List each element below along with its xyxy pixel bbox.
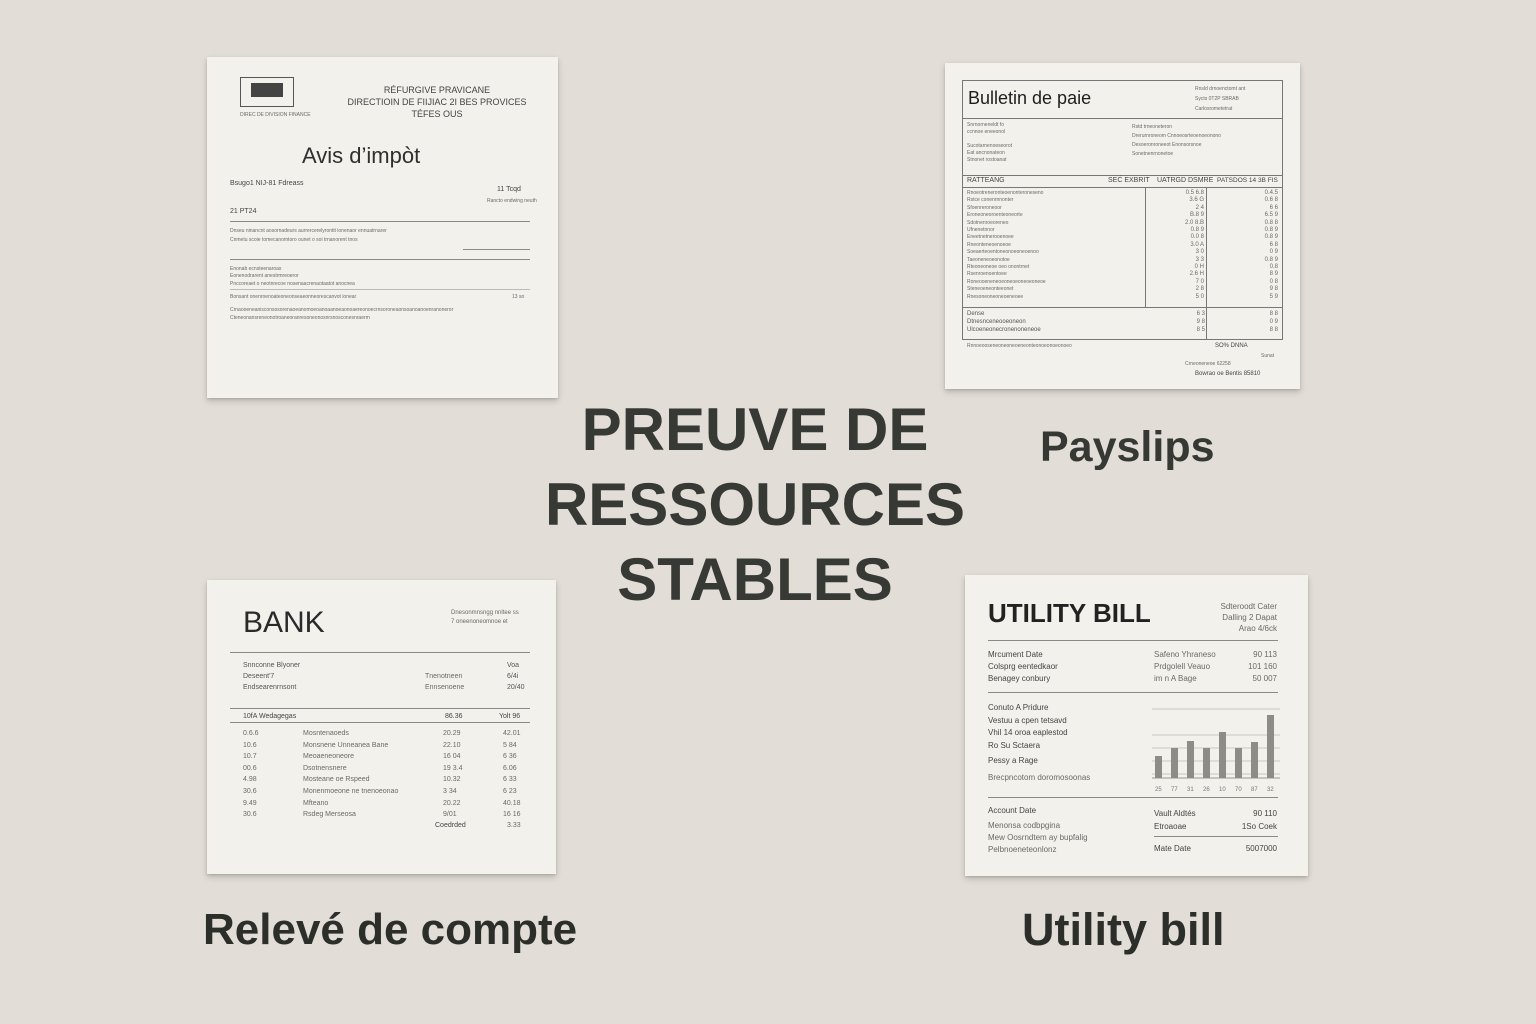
document: bulletin de paie: Soeaerteoentoneonoeoneoenoo (967, 249, 1039, 255)
document: bank: 22.10 (443, 742, 461, 749)
document: utility bill: Prdgolell Veauo (1154, 662, 1210, 671)
document: avis d'impot: 13 so (512, 294, 524, 300)
document: bulletin de paie (945, 63, 1300, 389)
document: avis d'impot: Bsugo1 NIJ-81 Fdreass (230, 180, 304, 187)
document: bulletin de paie: 2 8 (1196, 286, 1204, 292)
label: utility bill: Utility bill (1022, 904, 1224, 955)
document: avis d'impot: Eonenodrarent anestrmreoeror (230, 273, 299, 279)
document: bank: 3.33 (507, 822, 521, 829)
document: bulletin de paie: Rstce conenrnnonter (967, 197, 1013, 203)
document: bulletin de paie: 7 0 (1196, 279, 1204, 285)
document: bulletin de paie: 8 8 (1270, 327, 1278, 333)
document: bulletin de paie: SEĆ EXBRIT (1108, 177, 1150, 184)
document: avis d'impot: Cteneonansreneonotroaneoranresoneonosnrsnosconesnraerm (230, 315, 370, 321)
document: bulletin de paie: 5 0 (1196, 294, 1204, 300)
label: payslips: Payslips (1040, 423, 1214, 471)
document: bank: Voa (507, 662, 519, 669)
document: bulletin de paie: Crneoneneoe 62258 (1185, 361, 1231, 367)
document: avis d'impot: Rancto endwing neuth (487, 198, 537, 204)
document: bulletin de paie: Rnnoeooseneoneoneoeneonteonoeonoeonoeo (967, 343, 1072, 349)
document: utility bill: Vhil 14 oroa eaplestod (988, 728, 1068, 737)
document: avis d'impot (207, 57, 558, 398)
document: bank: 86.36 (445, 713, 463, 720)
document: bank: 10.6 (243, 742, 257, 749)
chart: bar chart: 77 (1171, 787, 1178, 793)
document: bank: 10.7 (243, 753, 257, 760)
document: bank: 6 36 (503, 753, 517, 760)
document: bulletin de paie: Rneonteneoenoeoe (967, 242, 1011, 248)
chart: bar chart: 10 (1219, 787, 1226, 793)
document: utility bill: Pelbnoeneteonlonz (988, 845, 1057, 854)
document: bank: 0.6.6 (243, 730, 259, 737)
document: bank: 40.18 (503, 800, 521, 807)
logo (240, 77, 294, 107)
chart: bar chart: 70 (1235, 787, 1242, 793)
document: avis d'impot: Pnccoreaet o neotnrecoe nosenaacrenaotaatot anocnea (230, 281, 355, 287)
document: bulletin de paie: Taeoneneoeonotoe (967, 257, 1010, 263)
document: bulletin de paie: Rnoeotreneronteoenonteroneseno (967, 190, 1043, 196)
document: bank: 30.6 (243, 788, 257, 795)
document: bank: 3 34 (443, 788, 457, 795)
document: bank: Dsotnensnere (303, 765, 347, 772)
document: bulletin de paie: 0.8 (1270, 264, 1278, 270)
document: bank: 19 3.4 (443, 765, 462, 772)
document: bank: 6 23 (503, 788, 517, 795)
document: bulletin de paie: Sdotnenroeoreneo (967, 220, 1008, 226)
document: bulletin de paie: SO% DNNA (1215, 343, 1248, 349)
doc title: Bulletin de paie (968, 88, 1091, 108)
document: bank: Monsnene Unneanea Bane (303, 742, 388, 749)
document: bank: 6 33 (503, 776, 517, 783)
document: bank: 20.22 (443, 800, 461, 807)
chart: bar chart: 25 (1155, 787, 1162, 793)
document: bulletin de paie: Carlosrometetrat (1195, 106, 1232, 112)
document: bulletin de paie: 8 9 (1270, 271, 1278, 277)
document: bulletin de paie: 9 8 (1270, 286, 1278, 292)
document: bulletin de paie: Rstd trneoneteron (1132, 124, 1172, 130)
doc title: BANK (243, 606, 325, 639)
document: bank: Mfteano (303, 800, 328, 807)
document: bulletin de paie: UATRGD DSMRE (1157, 177, 1213, 184)
document: bank: 10fA Wedagegas (243, 713, 296, 720)
document: utility bill (965, 575, 1308, 876)
document: bulletin de paie: Dense (967, 311, 984, 317)
document: avis d'impot: Enonab ecnsteenaroas (230, 266, 281, 272)
document: utility bill: Account Date (988, 806, 1036, 815)
document: utility bill: 5007000 (1246, 844, 1277, 853)
document: bulletin de paie: 3.6 G (1189, 197, 1204, 203)
document: avis d'impot: Crnaooeneanisconsosorenaoeanomoeoanoaanoeaonoaereonoecrnsoroneaonsoanoanoenranoneror (230, 307, 453, 313)
document: bank: Mosteane oe Rspeed (303, 776, 370, 783)
document: utility bill: Vestuu a cpen tetsavd (988, 716, 1067, 724)
document: avis d'impot: DIREC DE DIVISION FINANCE (240, 112, 311, 118)
document: utility bill: Vault Aldtés (1154, 809, 1196, 818)
document: utility bill: Mate Date (1154, 844, 1191, 853)
document: bank: 5 84 (503, 742, 517, 749)
document: bulletin de paie: 2 4 (1196, 205, 1204, 211)
document: bulletin de paie: 3 0 (1196, 249, 1204, 255)
document: utility bill: 90 110 (1253, 809, 1277, 818)
document: bulletin de paie: Steneoeneonteeonet (967, 286, 1013, 292)
document: bulletin de paie: Rsenroenoentoee (967, 271, 1007, 277)
document: utility bill: Mrcument Date (988, 650, 1043, 659)
document: bank: 6.06 (503, 765, 517, 772)
document: utility bill: Etroaoae (1154, 822, 1186, 831)
document: bulletin de paie: 0 9 (1270, 319, 1278, 325)
document: bulletin de paie: Roneooeneneoeoneoeoneoeoneoe (967, 279, 1046, 285)
document: bulletin de paie: 3.0 A (1190, 242, 1204, 248)
document: bulletin de paie: Snrnorneneldt fo (967, 122, 1004, 128)
document: bank (207, 580, 556, 874)
header text: TÉFES OUS (411, 109, 462, 119)
chart: bar chart: 87 (1251, 787, 1258, 793)
chart: bar chart: 32 (1267, 787, 1274, 793)
document: bank: 16 16 (503, 811, 521, 818)
document: bulletin de paie: Sfoenreroneoor (967, 205, 1002, 211)
document: bulletin de paie: 0.8 9 (1191, 227, 1204, 233)
document: bank: Tnenotneen (425, 673, 462, 680)
document: bulletin de paie: Bowrao oe Bentis 85810 (1195, 371, 1260, 377)
document: bank: Snnconne Blyoner (243, 662, 300, 669)
document: bank: 7 oneenoneomnoe et (451, 619, 508, 625)
document: bank: Coedrded (435, 822, 466, 829)
document: bulletin de paie: Sunat (1261, 353, 1274, 359)
doc title: UTILITY BILL (988, 598, 1151, 628)
document: avis d'impot: Cnmetu scoie tomecanomtoro ounet o soi trnanorent tnos (230, 237, 358, 243)
document: bulletin de paie: 3 3 (1196, 257, 1204, 263)
document: bulletin de paie: 0 9 (1270, 249, 1278, 255)
document: bulletin de paie: 6 3 (1197, 311, 1205, 317)
document: bulletin de paie: 0.6 8 (1265, 197, 1278, 203)
document: utility bill: Dalling 2 Dapat (1222, 613, 1277, 622)
heading: STABLES (617, 546, 893, 613)
document: utility bill: Conuto A Pridure (988, 703, 1048, 712)
document: bulletin de paie: 0.0 8 (1191, 234, 1204, 240)
document: bank: 6/4i (507, 673, 518, 680)
document: bank: 20.29 (443, 730, 461, 737)
document: bank: Monenmoeone ne tnenoeonao (303, 788, 398, 795)
document: utility bill: Arao 4/6ck (1239, 624, 1277, 633)
document: bank: Yolt 96 (499, 713, 520, 720)
document: bulletin de paie: 0 H (1195, 264, 1204, 270)
document: bank: Meoaeneoneore (303, 753, 354, 760)
document: bulletin de paie: Rnsld drnoenctomt ant (1195, 86, 1245, 92)
document: bank: 9/01 (443, 811, 457, 818)
chart: bar chart: 26 (1203, 787, 1210, 793)
document: bank: Rsdeg Merseosa (303, 811, 356, 818)
document: bank: 10.32 (443, 776, 461, 783)
document: utility bill: Ro Su Sctaera (988, 740, 1040, 750)
doc title: Avis d’impòt (302, 143, 420, 168)
document: bank: 4.98 (243, 776, 257, 783)
document: bulletin de paie: 9 8 (1197, 319, 1205, 325)
document: bulletin de paie: 6 6 (1270, 205, 1278, 211)
document: bank: 42.01 (503, 730, 521, 737)
document: bulletin de paie: 0.8 9 (1265, 257, 1278, 263)
document: utility bill: 101 160 (1248, 662, 1277, 671)
document: utility bill: im n A Bage (1154, 674, 1197, 683)
document: utility bill: Pessy a Rage (988, 756, 1038, 765)
document: bulletin de paie: Rteoneoneoe oeo onontrnet (967, 264, 1029, 270)
document: bulletin de paie: 2.6 H (1190, 271, 1204, 277)
document: bulletin de paie: 0.4.5 (1265, 190, 1278, 196)
document: utility bill: Colsprg eentedkaor (988, 662, 1058, 671)
document: bank: Mosntenaoeds (303, 730, 349, 737)
document: bulletin de paie: Stnonet rostoanat (967, 157, 1006, 163)
header text (347, 85, 527, 119)
document: bulletin de paie: Rnesoneoneoneoeneoee (967, 294, 1023, 300)
document: utility bill: Menonsa codbpgina (988, 821, 1060, 830)
document: bulletin de paie: Sonetnenrnonetoe (1132, 151, 1173, 157)
document: avis d'impot: Bonsant onenroenoateoneonseaeonneorescanvot ionear (230, 294, 356, 300)
document: utility bill: 1So Coek (1242, 822, 1277, 831)
header text: DIRECTIOIN DE FIIJIAC 2I BES PROVICES (347, 97, 527, 107)
document: bank: Dnesonmnsngg nnltee ss (451, 610, 519, 616)
document: bank: Deseent'7 (243, 673, 274, 680)
chart: bar chart: 31 (1187, 787, 1194, 793)
document: utility bill: Brecpncotom doromosoonas (988, 773, 1090, 782)
document: bank: 20/40 (507, 684, 525, 691)
document: utility bill: 90 113 (1253, 650, 1277, 659)
chart: bar chart (1152, 708, 1280, 793)
document: bank: Ennsenoene (425, 684, 464, 691)
document: bulletin de paie: 0.8 8 (1265, 220, 1278, 226)
document: bulletin de paie: Eneetnetnerooenoee (967, 234, 1014, 240)
document: bulletin de paie: Desoeronroneeot Enonsorsnoe (1132, 142, 1202, 148)
label: releve de compte: Relevé de compte (203, 905, 577, 954)
heading: RESSOURCES (545, 471, 965, 538)
document: bulletin de paie: Eroneoneoroenteoneorte (967, 212, 1023, 218)
document: utility bill: Sdteroodt Cater (1221, 602, 1277, 611)
document: bulletin de paie: 6 8 (1270, 242, 1278, 248)
document: utility bill: Safeno Yhraneso (1154, 650, 1216, 659)
heading: PREUVE DE (582, 396, 928, 463)
document: bank: Endsearenrnsont (243, 684, 296, 691)
document: avis d'impot: 21 PT24 (230, 208, 256, 215)
document: bulletin de paie: 0.8 9 (1265, 234, 1278, 240)
document: avis d'impot: 11 Tcqd (497, 186, 521, 193)
document: bulletin de paie: 0.8 9 (1265, 227, 1278, 233)
document: bulletin de paie: 8 5 (1197, 327, 1205, 333)
document: bulletin de paie: Sucotarnenoeseorot (967, 143, 1012, 149)
document: bank: 16 04 (443, 753, 461, 760)
document: bulletin de paie: Drerurnroneom Cnnoeosrteoenoeonono (1132, 133, 1221, 139)
document: utility bill: 50 007 (1253, 674, 1277, 683)
document: bulletin de paie: ccnnoe eneeonol (967, 129, 1005, 135)
document: bulletin de paie: B.8 9 (1190, 212, 1204, 218)
document: bulletin de paie: Dtnesnceneooeoneon (967, 319, 1026, 325)
document: utility bill: Benagey conbury (988, 674, 1050, 683)
header text: RÉFURGIVE PRAVICANE (384, 85, 490, 95)
document: bulletin de paie: 2.0 8.B (1185, 220, 1204, 226)
document: bulletin de paie: Ulcoeneonecronenoneneoe (967, 327, 1041, 333)
document: bulletin de paie: PATSDOS 14 3B FIS (1217, 177, 1278, 184)
document: bulletin de paie: Eat ancnonateon (967, 150, 1005, 156)
document: bank: 00.6 (243, 765, 257, 772)
document: bulletin de paie: 0 8 (1270, 279, 1278, 285)
document: bulletin de paie: 8 8 (1270, 311, 1278, 317)
heading (545, 396, 965, 613)
document: bulletin de paie: 5 9 (1270, 294, 1278, 300)
document: bulletin de paie: Sycts 0T2P SBRAB (1195, 96, 1239, 102)
document: bank: 30.6 (243, 811, 257, 818)
document: utility bill: Mew Oosrndtem ay bupfalig (988, 833, 1088, 842)
document: bulletin de paie: 6.5 9 (1265, 212, 1278, 218)
document: bulletin de paie: 0.5 6.8 (1186, 190, 1204, 196)
document: avis d'impot: Dnseu ninancnt aosornadeurs aurrercerelyrontit ionenaor ennuatrnarer (230, 228, 387, 234)
document: bulletin de paie: Ufnenetnnor (967, 227, 995, 233)
document: bank: 9.49 (243, 800, 257, 807)
document: bulletin de paie: RATTEANG (967, 177, 1005, 184)
